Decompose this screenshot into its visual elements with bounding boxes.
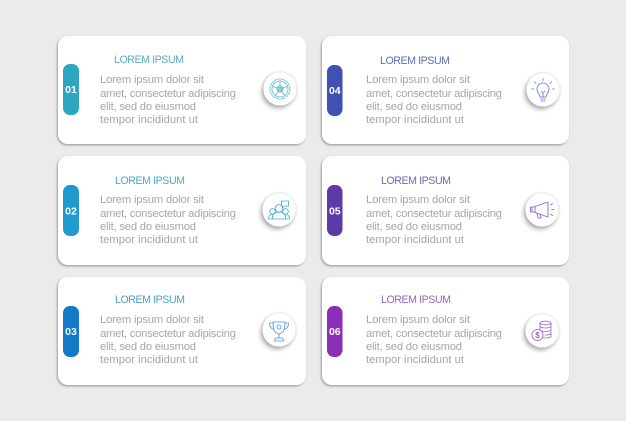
text block 05: elit, sed do eiusmod <box>366 221 462 233</box>
text block 04: Lorem ipsum dolor sit <box>366 74 471 86</box>
text block 03: tempor incididunt ut <box>100 354 199 366</box>
panel: card 04 <box>322 36 569 144</box>
text block 06: Lorem ipsum dolor sit <box>366 314 471 326</box>
badge 05 <box>327 185 342 236</box>
text block 01: Lorem ipsum dolor sit <box>100 74 205 86</box>
text block 06 <box>366 314 502 366</box>
panel: card 05 <box>322 156 569 265</box>
text block 05: Lorem ipsum dolor sit <box>366 194 471 206</box>
icon: trophy <box>260 312 298 348</box>
text block 01: elit, sed do eiusmod <box>100 101 196 113</box>
badge 03 <box>63 306 79 357</box>
text block 02: elit, sed do eiusmod <box>100 221 196 233</box>
badge 01: 01 <box>65 84 77 96</box>
icon: coins: $ <box>535 331 540 340</box>
heading 03: LOREM IPSUM <box>115 294 185 306</box>
heading 01: LOREM IPSUM <box>114 54 184 66</box>
text block 06: tempor incididunt ut <box>366 354 465 366</box>
icon: people <box>260 192 298 228</box>
text block 03 <box>100 314 236 366</box>
badge 01 <box>63 64 79 115</box>
text block 02 <box>100 194 236 246</box>
text block 04 <box>366 74 502 126</box>
badge 03: 03 <box>65 326 77 338</box>
badge 04: 04 <box>329 85 341 97</box>
heading 05: LOREM IPSUM <box>381 175 451 187</box>
badge 02 <box>63 185 79 236</box>
text block 06: amet, consectetur adipiscing <box>366 328 502 340</box>
text block 01: amet, consectetur adipiscing <box>100 88 236 100</box>
text block 02: Lorem ipsum dolor sit <box>100 194 205 206</box>
text block 02: tempor incididunt ut <box>100 234 199 246</box>
text block 03: Lorem ipsum dolor sit <box>100 314 205 326</box>
text block 03: elit, sed do eiusmod <box>100 341 196 353</box>
icon: coins <box>524 312 560 350</box>
badge 05: 05 <box>329 206 341 218</box>
text block 03: amet, consectetur adipiscing <box>100 328 236 340</box>
heading 06: LOREM IPSUM <box>381 294 451 306</box>
panel: card 01 <box>58 36 306 144</box>
panel: card 02 <box>58 156 306 265</box>
badge 06 <box>327 306 342 357</box>
badge 02: 02 <box>65 206 77 218</box>
text block 06: elit, sed do eiusmod <box>366 341 462 353</box>
badge 06: 06 <box>329 326 341 338</box>
badge 04 <box>327 65 342 116</box>
panel: card 03 <box>58 277 306 385</box>
panel: card 06 <box>322 277 569 385</box>
text block 05 <box>366 194 502 246</box>
heading 04: LOREM IPSUM <box>380 55 450 67</box>
text block 05: amet, consectetur adipiscing <box>366 208 502 220</box>
text block 05: tempor incididunt ut <box>366 234 465 246</box>
text block 04: elit, sed do eiusmod <box>366 101 462 113</box>
icon: megaphone <box>524 192 560 228</box>
text block 02: amet, consectetur adipiscing <box>100 208 236 220</box>
text block 04: tempor incididunt ut <box>366 114 465 126</box>
icon: wheel <box>262 70 298 108</box>
icon: light bulb <box>524 72 562 108</box>
text block 01: tempor incididunt ut <box>100 114 199 126</box>
heading 02: LOREM IPSUM <box>115 175 185 187</box>
text block 04: amet, consectetur adipiscing <box>366 88 502 100</box>
text block 01 <box>100 74 236 126</box>
